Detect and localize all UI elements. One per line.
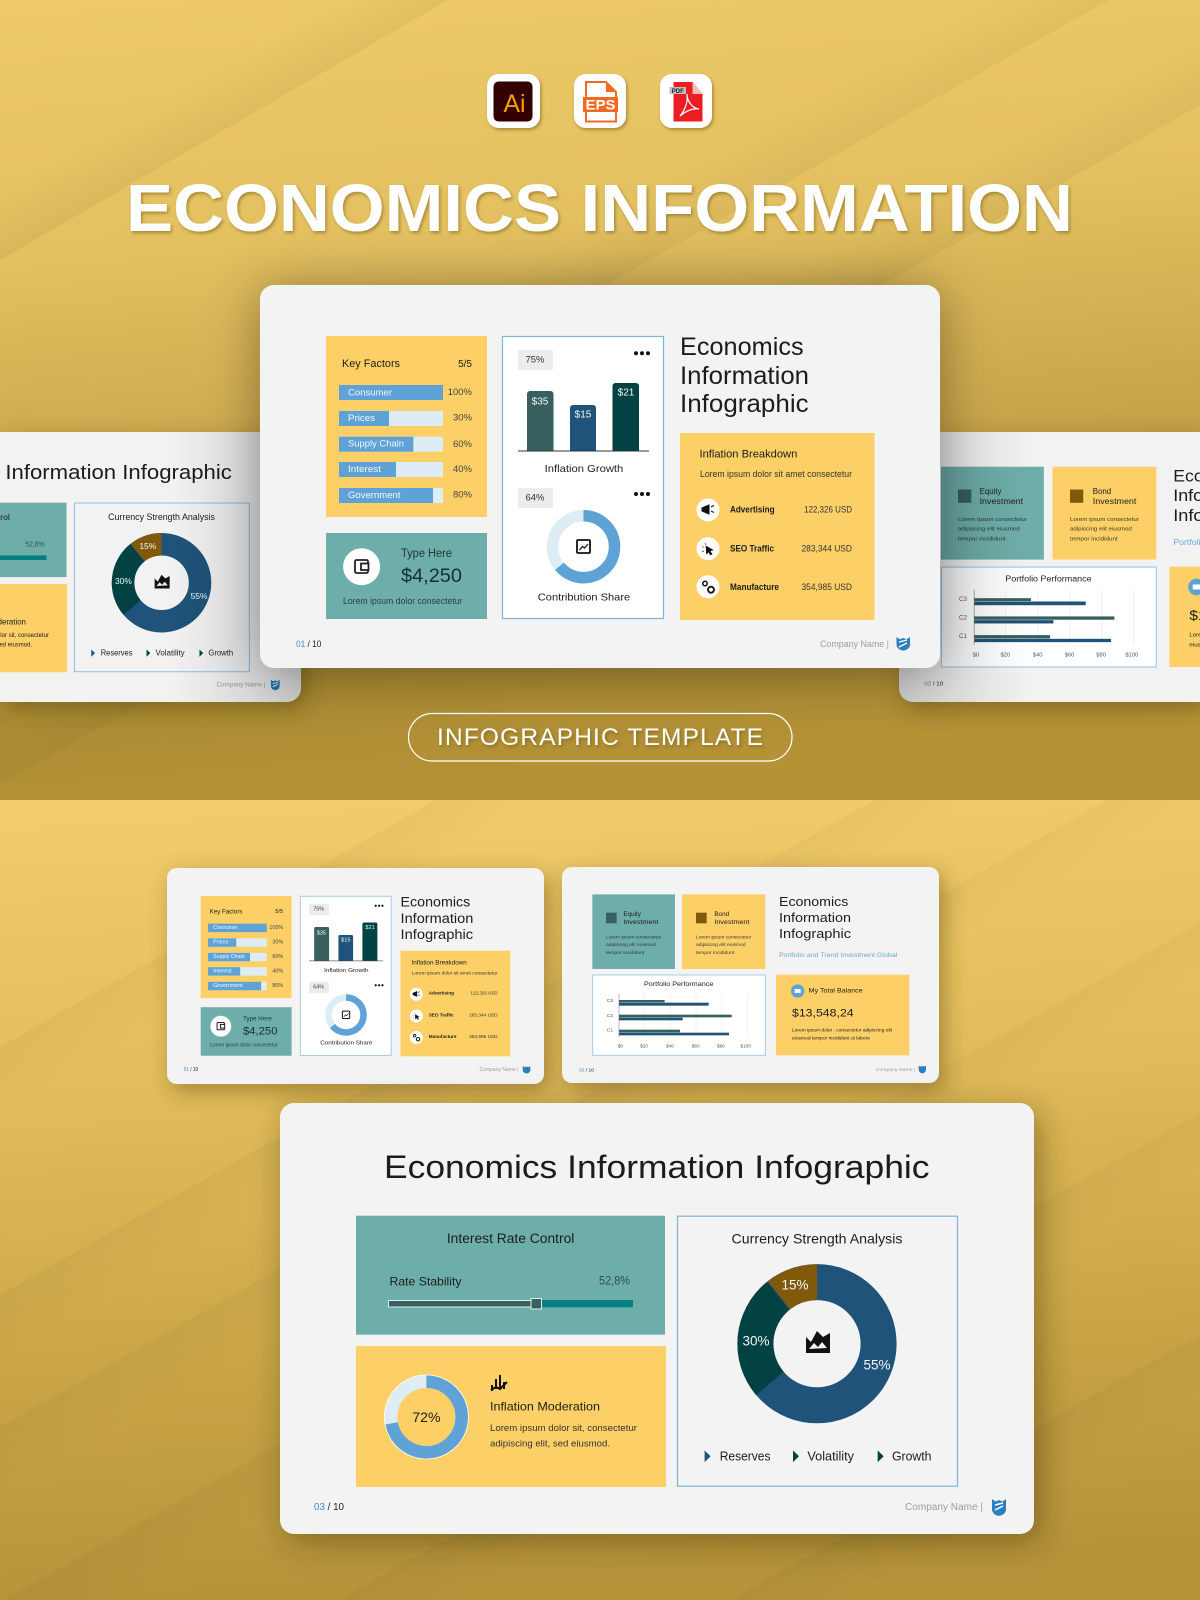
panel: total balance bbox=[776, 975, 909, 1055]
bar chart: portfolio performance bbox=[593, 975, 765, 1055]
bar chart: inflation growth bbox=[518, 383, 649, 452]
slide content: investments: $100 bbox=[1125, 652, 1138, 658]
slide content: investments: $0 bbox=[973, 652, 979, 658]
panel: charts card: 75% bbox=[313, 907, 324, 913]
bar chart: inflation growth: $15 bbox=[575, 410, 592, 420]
panel: equity investment: Lorem ipsum consectetur bbox=[606, 934, 662, 939]
panel: key factors: 40% bbox=[272, 968, 283, 974]
panel: inflation breakdown: 354,985 USD bbox=[469, 1034, 498, 1040]
slide content: investments: C1 bbox=[959, 633, 968, 640]
panel: key factors: Prices bbox=[348, 413, 375, 424]
footer: 02 / 10 bbox=[579, 1067, 594, 1072]
slide heading: Information bbox=[680, 362, 809, 390]
panel: key factors bbox=[201, 896, 292, 998]
bar chart: portfolio performance: C1 bbox=[607, 1028, 613, 1034]
panel: charts card: 64% bbox=[525, 492, 545, 504]
panel: inflation breakdown: Lorem ipsum dolor sit amet consectetur bbox=[412, 970, 498, 976]
panel: key factors: Supply Chain bbox=[213, 954, 245, 960]
panel: key factors: 30% bbox=[272, 939, 283, 945]
slide heading bbox=[680, 333, 809, 418]
slide content: investments: 02 / 10 bbox=[924, 681, 943, 687]
panel: inflation breakdown: 122,326 USD bbox=[804, 504, 852, 514]
slider bbox=[388, 1298, 633, 1309]
bar chart: portfolio performance: $40 bbox=[666, 1043, 674, 1048]
panel: balance card: $4,250 bbox=[243, 1025, 277, 1037]
footer bbox=[314, 1499, 1006, 1516]
footer: Company Name | bbox=[905, 1501, 983, 1513]
icon: EPS file: EPS bbox=[586, 96, 616, 112]
main title: ECONOMICS INFORMATION bbox=[126, 171, 1073, 246]
panel: charts card bbox=[300, 896, 391, 1055]
panel: balance card: Lorem ipsum dolor consectetur bbox=[210, 1043, 278, 1049]
panel: charts card: Contribution Share bbox=[320, 1041, 373, 1047]
panel: charts card: Contribution Share bbox=[538, 592, 630, 604]
footer: Company Name | bbox=[820, 639, 889, 649]
slide heading: Economics bbox=[680, 333, 804, 361]
panel: balance card: Type Here bbox=[243, 1016, 272, 1023]
slide heading: Information bbox=[779, 910, 851, 925]
icon: Adobe Illustrator bbox=[487, 74, 540, 128]
bar chart: portfolio performance: $80 bbox=[717, 1043, 725, 1048]
panel: interest rate control: Rate Stability bbox=[390, 1275, 462, 1289]
panel: key factors: Supply Chain bbox=[348, 438, 404, 450]
slide content: investments: tempor incididunt bbox=[958, 536, 1006, 542]
panel: key factors: 60% bbox=[272, 954, 283, 960]
panel: inflation breakdown: 354,985 USD bbox=[802, 582, 852, 592]
panel: interest rate control bbox=[356, 1216, 665, 1335]
panel: key factors: 100% bbox=[448, 387, 473, 398]
panel: key factors: Government bbox=[213, 983, 243, 989]
tag: infographic template: INFOGRAPHIC TEMPLATE bbox=[437, 724, 763, 751]
slide content: currency strength: Growth bbox=[208, 649, 233, 658]
slide content: investments: Equity bbox=[980, 487, 1002, 496]
slide: left partial, slide 03 bbox=[0, 432, 301, 702]
panel: equity investment: adipiscing elit eiusmod bbox=[606, 942, 656, 947]
bar chart: portfolio performance: $20 bbox=[640, 1043, 648, 1048]
donut chart: currency: 15% bbox=[781, 1278, 809, 1292]
panel: key factors: Interest bbox=[348, 464, 381, 475]
panel: key factors: Prices bbox=[213, 940, 229, 946]
donut chart: currency bbox=[737, 1264, 891, 1405]
panel: key factors: 100% bbox=[269, 925, 283, 931]
panel: balance card bbox=[326, 533, 487, 619]
slide heading: Economics bbox=[779, 894, 849, 909]
slide content: investments: $80 bbox=[1096, 652, 1106, 658]
slide content: investments: Portfolio Performance bbox=[1005, 574, 1092, 584]
slide heading bbox=[401, 894, 473, 942]
bar chart: portfolio performance: C3 bbox=[607, 998, 613, 1004]
slide content: investments: Lorem ipsum consectetur bbox=[1070, 517, 1139, 523]
slide content: currency strength: Volatility bbox=[156, 649, 185, 658]
panel: inflation breakdown: Advertising bbox=[730, 504, 775, 514]
panel: key factors: 5/5 bbox=[275, 909, 283, 915]
footer: 01 / 10 bbox=[296, 639, 321, 649]
slide content: investments: Bond bbox=[1093, 487, 1111, 496]
slide content: investments: C2 bbox=[959, 615, 968, 622]
panel: inflation breakdown: Manufacture bbox=[730, 582, 779, 592]
slide content: currency strength: Currency Strength Analysis bbox=[108, 512, 216, 522]
slide heading: Infographic bbox=[401, 926, 473, 942]
panel: balance card: Type Here bbox=[401, 548, 452, 560]
panel: key factors: 80% bbox=[453, 490, 473, 500]
footer bbox=[184, 1066, 530, 1074]
donut chart: currency: 30% bbox=[742, 1334, 770, 1348]
panel: balance card: Lorem ipsum dolor consectetur bbox=[343, 596, 462, 606]
icon: wallet bbox=[355, 560, 368, 573]
legend bbox=[705, 1449, 932, 1463]
bar chart: inflation growth: $21 bbox=[618, 388, 635, 398]
panel: key factors: 30% bbox=[453, 412, 473, 424]
panel: key factors: Government bbox=[348, 490, 401, 501]
slide content: investments: Investment bbox=[980, 497, 1024, 506]
panel: inflation breakdown bbox=[401, 951, 510, 1056]
footer bbox=[296, 637, 910, 650]
slide: small 01 bbox=[167, 868, 544, 1084]
panel: inflation breakdown: 283,344 USD bbox=[802, 544, 852, 554]
panel: total balance: My Total Balance bbox=[809, 987, 863, 994]
slide content: investments: adipiscing elit eiusmod bbox=[1070, 526, 1132, 532]
slide content: currency strength: 55% bbox=[191, 591, 208, 601]
panel: charts card bbox=[502, 336, 664, 618]
panel: key factors: 60% bbox=[453, 439, 473, 450]
panel: bond investment: Bond bbox=[714, 911, 730, 918]
icon row: file formats bbox=[487, 74, 712, 128]
slide: small 02 bbox=[562, 867, 939, 1083]
panel: total balance: eiusmod tempor incididunt ut labore bbox=[792, 1035, 871, 1040]
panel: key factors: Key Factors bbox=[342, 358, 400, 370]
slide content: currency strength: 30% bbox=[115, 576, 132, 586]
panel: inflation breakdown: Inflation Breakdown bbox=[412, 960, 467, 967]
donut chart: 72% bbox=[384, 1375, 468, 1459]
bar chart: inflation growth: $35 bbox=[532, 396, 549, 408]
panel: bond investment: Lorem ipsum consectetur bbox=[696, 934, 752, 939]
panel: inflation breakdown bbox=[680, 433, 874, 620]
panel: total balance: Lorem ipsum dolor . consectetur adipiscing elit bbox=[792, 1027, 893, 1032]
panel: equity investment: Investment bbox=[623, 919, 659, 926]
panel: bond investment: tempor incididunt bbox=[696, 950, 735, 955]
panel: key factors: Key Factors bbox=[210, 908, 242, 915]
slide content: currency strength: Reserves bbox=[101, 649, 133, 658]
slide content: investments: tempor incididunt bbox=[1070, 536, 1118, 542]
bar chart: portfolio performance: $60 bbox=[692, 1043, 700, 1048]
panel: equity investment: tempor incididunt bbox=[606, 950, 645, 955]
panel: inflation breakdown: Advertising bbox=[429, 990, 454, 996]
slide heading bbox=[779, 894, 897, 959]
panel: bond investment: Investment bbox=[714, 919, 750, 926]
panel: inflation breakdown: Manufacture bbox=[429, 1034, 457, 1040]
slide content: investments bbox=[924, 466, 1200, 687]
tag: infographic template bbox=[408, 714, 792, 761]
slide heading: Infographic bbox=[779, 926, 851, 941]
panel: inflation breakdown: Inflation Breakdown bbox=[700, 449, 797, 461]
icon: Adobe Illustrator: Ai bbox=[504, 90, 526, 118]
bar chart: portfolio performance: Portfolio Performance bbox=[644, 981, 714, 988]
panel: charts card: Inflation Growth bbox=[324, 968, 369, 974]
panel: key factors: Interest bbox=[213, 968, 232, 974]
slide heading: Economics Information Infographic bbox=[384, 1149, 930, 1185]
panel: charts card: Inflation Growth bbox=[545, 463, 623, 475]
background: bottom section bbox=[0, 800, 1200, 1600]
slide content: currency strength: 52,8% bbox=[25, 539, 45, 548]
panel: equity investment bbox=[592, 894, 675, 969]
panel: total balance: $13,548,24 bbox=[792, 1008, 854, 1020]
legend: Growth bbox=[892, 1449, 932, 1463]
panel: balance card bbox=[201, 1007, 292, 1056]
slide: main, slide 01 bbox=[260, 285, 940, 668]
legend: Reserves bbox=[720, 1449, 770, 1463]
bar chart: portfolio performance: $0 bbox=[618, 1043, 623, 1048]
panel: bond investment: adipiscing elit eiusmod bbox=[696, 942, 746, 947]
panel: inflation moderation: Inflation Moderation bbox=[490, 1400, 600, 1414]
slide heading: Economics bbox=[401, 894, 470, 910]
panel: interest rate control: 52,8% bbox=[599, 1276, 630, 1288]
slide heading: Infographic bbox=[680, 390, 809, 418]
panel: charts card: 75% bbox=[525, 354, 545, 366]
icon: PDF file bbox=[660, 74, 712, 128]
panel: inflation moderation: adipiscing elit, sed eiusmod. bbox=[490, 1438, 610, 1450]
slide content: investments: $40 bbox=[1033, 652, 1042, 658]
panel: currency strength analysis: Currency Strength Analysis bbox=[732, 1231, 902, 1247]
panel: balance card: $4,250 bbox=[401, 565, 462, 587]
panel: key factors: Consumer bbox=[213, 925, 238, 931]
panel: equity investment: Equity bbox=[623, 911, 642, 918]
background: top section bbox=[0, 0, 1200, 800]
slide: large 03 bbox=[280, 1103, 1034, 1534]
panel: charts card: $21 bbox=[365, 925, 375, 931]
slide content: investments: adipiscing elit eiusmod bbox=[958, 526, 1020, 532]
donut chart: contribution share bbox=[552, 516, 614, 578]
icon: shield logo bbox=[896, 637, 910, 650]
footer: 03 / 10 bbox=[314, 1501, 344, 1513]
panel: inflation breakdown: 283,344 USD bbox=[469, 1012, 498, 1018]
icon: PDF file: PDF bbox=[672, 89, 684, 95]
footer: Company Name | bbox=[876, 1067, 915, 1072]
slide content: investments: Investment bbox=[1093, 497, 1137, 506]
slide heading: Information bbox=[401, 910, 473, 926]
slide content: currency strength: 15% bbox=[139, 541, 157, 551]
panel: key factors bbox=[326, 336, 487, 517]
slide heading: Portfolio and Trend Investment Global bbox=[779, 952, 897, 959]
slide content: investments: C3 bbox=[959, 596, 968, 603]
panel: key factors: 5/5 bbox=[458, 359, 472, 370]
slide content: investments: Lorem ipsum consectetur bbox=[958, 517, 1027, 523]
slide: right partial, slide 02 bbox=[899, 432, 1200, 702]
slide content: currency strength: Company Name | bbox=[217, 681, 266, 688]
panel: interest rate control: Interest Rate Control bbox=[447, 1231, 574, 1246]
footer: Company Name | bbox=[480, 1067, 519, 1073]
panel: charts card: 64% bbox=[313, 984, 324, 990]
donut chart: 72%: 72% bbox=[412, 1409, 440, 1425]
icon: chart bbox=[491, 1375, 507, 1391]
panel: key factors: Consumer bbox=[348, 387, 392, 398]
donut chart: currency: 55% bbox=[863, 1358, 891, 1372]
icon: shield logo bbox=[992, 1499, 1006, 1516]
panel: key factors: 80% bbox=[272, 983, 283, 989]
panel: inflation breakdown: Lorem ipsum dolor sit amet consectetur bbox=[700, 469, 852, 479]
icon: mountain bbox=[806, 1331, 830, 1353]
panel: inflation moderation: Lorem ipsum dolor sit, consectetur bbox=[490, 1423, 637, 1434]
panel: currency strength analysis bbox=[678, 1216, 958, 1486]
footer bbox=[579, 1066, 926, 1073]
bar chart: portfolio performance: C2 bbox=[607, 1013, 613, 1019]
slide content: investments: $20 bbox=[1000, 652, 1010, 658]
slide content: investments: $60 bbox=[1065, 652, 1074, 658]
slide content: currency strength bbox=[0, 462, 280, 690]
bar chart: portfolio performance: $100 bbox=[740, 1043, 751, 1048]
panel: inflation breakdown: 122,326 USD bbox=[471, 990, 498, 996]
panel: inflation moderation bbox=[356, 1346, 666, 1487]
panel: bond investment bbox=[682, 894, 765, 969]
legend: Volatility bbox=[807, 1449, 855, 1463]
panel: inflation breakdown: SEO Traffic bbox=[730, 544, 774, 554]
icon: EPS file bbox=[574, 74, 626, 128]
panel: charts card: $15 bbox=[341, 938, 350, 944]
panel: inflation breakdown: SEO Traffic bbox=[429, 1012, 454, 1018]
footer: 01 / 10 bbox=[184, 1067, 198, 1073]
panel: charts card: $35 bbox=[317, 930, 326, 936]
panel: key factors: 40% bbox=[453, 464, 473, 475]
